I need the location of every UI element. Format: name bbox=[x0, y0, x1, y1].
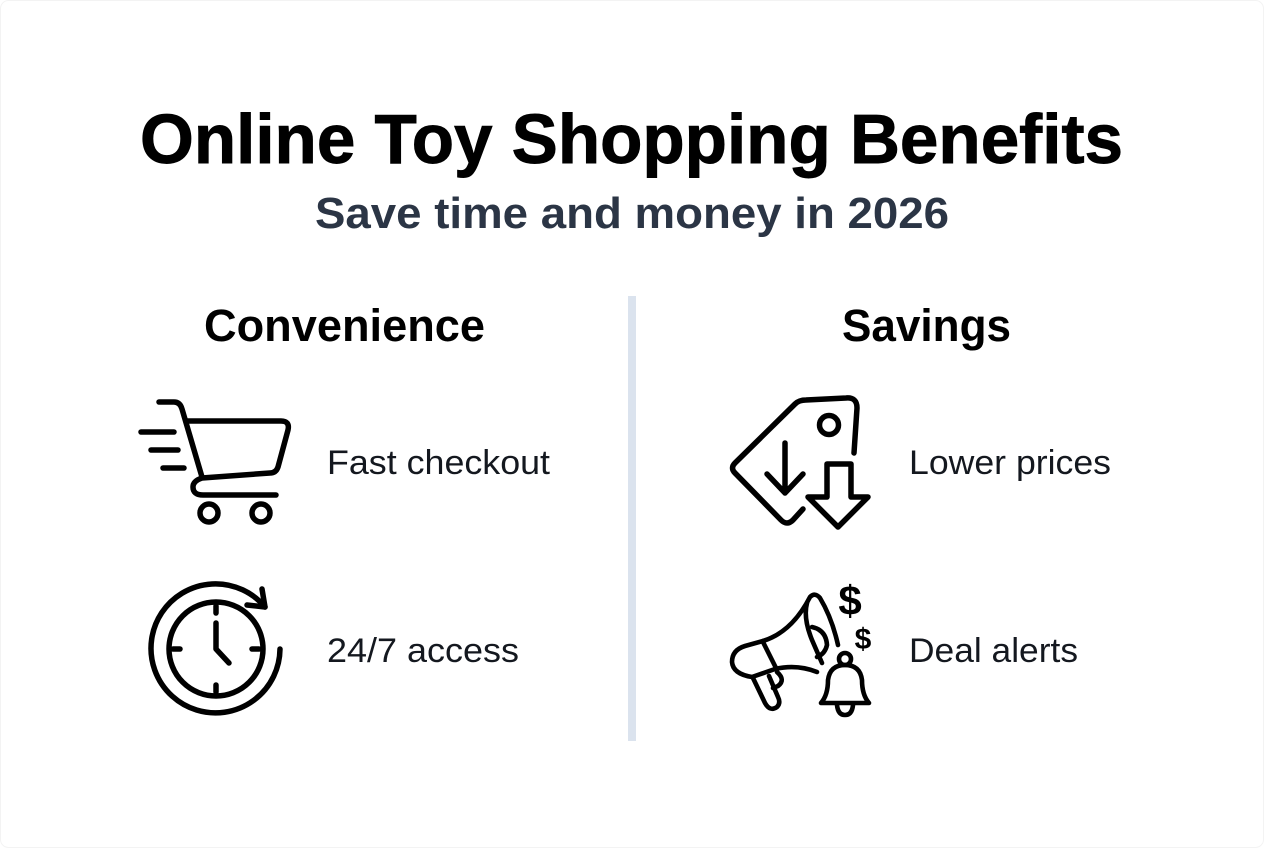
icon: price tag with down arrow bbox=[732, 398, 868, 527]
divider bbox=[628, 296, 636, 741]
icon: clock with arrow bbox=[151, 584, 280, 713]
label: deal alerts: Deal alerts bbox=[909, 632, 1078, 670]
dollar sign small: $ bbox=[855, 623, 872, 656]
subtitle: Save time and money in 2026 bbox=[315, 189, 949, 238]
title: Online Toy Shopping Benefits bbox=[140, 100, 1123, 178]
dollar sign large: $ bbox=[838, 577, 862, 624]
heading: savings: Savings bbox=[842, 300, 1011, 351]
label: 24/7 access: 24/7 access bbox=[327, 632, 519, 670]
panel: savings bbox=[732, 300, 1111, 715]
label: fast checkout: Fast checkout bbox=[327, 444, 551, 482]
panel: convenience bbox=[141, 300, 551, 713]
heading: convenience: Convenience bbox=[204, 300, 485, 351]
icon: shopping cart bbox=[141, 402, 288, 522]
icon: megaphone with bell and dollars bbox=[732, 577, 872, 715]
label: lower prices: Lower prices bbox=[909, 444, 1111, 482]
